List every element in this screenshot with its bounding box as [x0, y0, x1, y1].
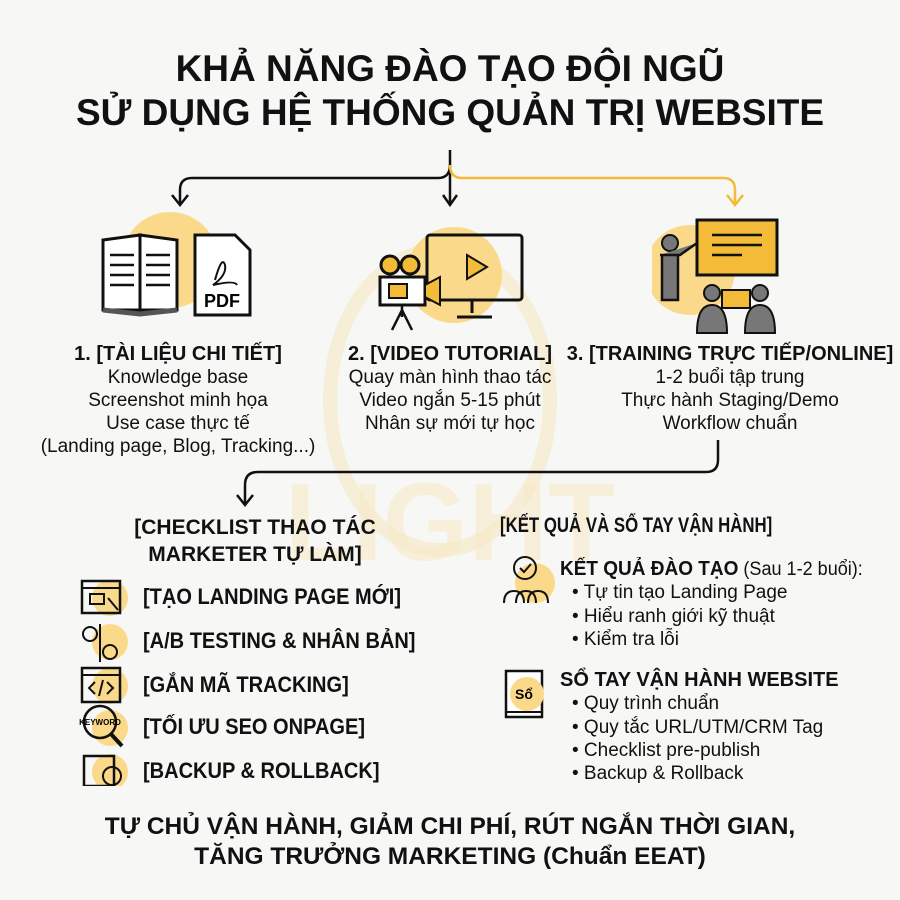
- column 3: training: 3. [TRAINING TRỰC TIẾP/ONLINE]: [567, 343, 893, 365]
- right heading: [KẾT QUẢ VÀ SỔ TAY VẬN HÀNH]: [500, 514, 772, 537]
- icon: team check: [503, 556, 555, 603]
- footer: [105, 812, 795, 870]
- column 2: video: Quay màn hình thao tác: [349, 367, 551, 388]
- icon: trainer: [652, 218, 778, 334]
- icon: video: [378, 227, 524, 330]
- block: kết quả đào tạo: • Hiểu ranh giới kỹ thuật: [572, 606, 775, 627]
- block: kết quả đào tạo: • Kiểm tra lỗi: [572, 629, 679, 650]
- column 1: tài liệu: 1. [TÀI LIỆU CHI TIẾT]: [74, 343, 282, 365]
- footer: TĂNG TRƯỞNG MARKETING (Chuẩn EEAT): [194, 843, 706, 870]
- column 3: training: [567, 342, 893, 434]
- block: sổ tay vận hành: • Quy tắc URL/UTM/CRM Tag: [572, 717, 823, 738]
- title: KHẢ NĂNG ĐÀO TẠO ĐỘI NGŨ: [176, 48, 724, 89]
- checklist items: [TỐI ƯU SEO ONPAGE]: [143, 714, 365, 739]
- icon: book and pdf: [102, 212, 252, 316]
- block: kết quả đào tạo: • Tự tin tạo Landing Page: [572, 582, 788, 603]
- block: sổ tay vận hành: • Checklist pre-publish: [572, 740, 760, 761]
- checklist items: [BACKUP & ROLLBACK]: [143, 758, 380, 783]
- column 3: training: Thực hành Staging/Demo: [621, 390, 839, 411]
- column 3: training: 1-2 buổi tập trung: [656, 367, 804, 388]
- block: sổ tay vận hành: [560, 668, 839, 784]
- checklist items: KEYWORD: [79, 718, 121, 727]
- column 2: video: 2. [VIDEO TUTORIAL]: [348, 343, 552, 365]
- icon: sổ tay: Sổ: [515, 686, 533, 702]
- checklist heading: [134, 515, 376, 566]
- checklist items: [A/B TESTING & NHÂN BẢN]: [143, 628, 415, 653]
- column 1: tài liệu: Use case thực tế: [106, 413, 250, 434]
- block: kết quả đào tạo: KẾT QUẢ ĐÀO TẠO (Sau 1-2 buổi):: [560, 558, 863, 580]
- column 2: video: Nhân sự mới tự học: [365, 413, 535, 434]
- arrows: top branches: [171, 150, 744, 507]
- column 3: training: Workflow chuẩn: [663, 413, 797, 434]
- footer: TỰ CHỦ VẬN HÀNH, GIẢM CHI PHÍ, RÚT NGẮN THỜI GIAN,: [105, 813, 795, 840]
- column 2: video: Video ngắn 5-15 phút: [359, 390, 541, 411]
- column 1: tài liệu: Screenshot minh họa: [88, 390, 268, 411]
- watermark: LIGHT: [285, 461, 615, 584]
- icon: sổ tay: [504, 670, 544, 718]
- title: SỬ DỤNG HỆ THỐNG QUẢN TRỊ WEBSITE: [76, 92, 824, 133]
- column 2: video: [348, 343, 552, 434]
- checklist heading: MARKETER TỰ LÀM]: [148, 543, 362, 566]
- block: kết quả đào tạo: [560, 557, 863, 650]
- icon: book and pdf: PDF: [204, 291, 240, 311]
- block: sổ tay vận hành: SỔ TAY VẬN HÀNH WEBSITE: [560, 669, 839, 691]
- checklist items: [TẠO LANDING PAGE MỚI]: [143, 584, 401, 609]
- column 1: tài liệu: (Landing page, Blog, Tracking...): [41, 436, 315, 457]
- checklist items: [GẮN MÃ TRACKING]: [143, 672, 349, 697]
- checklist items: [79, 580, 415, 786]
- column 1: tài liệu: Knowledge base: [108, 367, 248, 388]
- block: sổ tay vận hành: • Quy trình chuẩn: [572, 693, 719, 714]
- block: sổ tay vận hành: • Backup & Rollback: [572, 763, 743, 784]
- title: [76, 48, 824, 133]
- checklist heading: [CHECKLIST THAO TÁC: [134, 516, 376, 539]
- column 1: tài liệu: [41, 342, 315, 457]
